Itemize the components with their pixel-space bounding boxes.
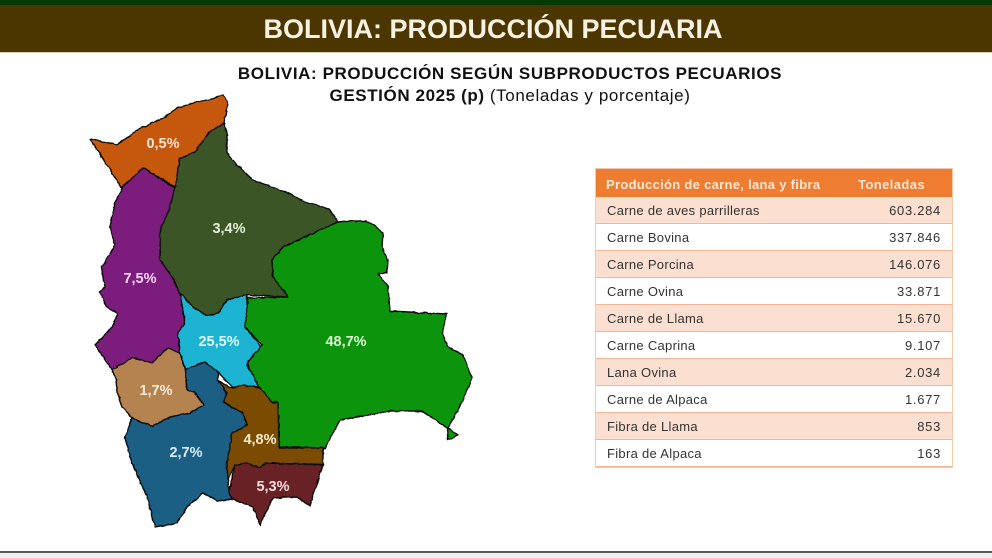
region: La Paz 7,5%: 7,5% — [123, 271, 157, 287]
top dark green strip — [0, 0, 992, 5]
row: Carne Ovina — [596, 278, 952, 305]
region: Oruro 1,7%: 1,7% — [139, 383, 173, 399]
row: Carne de Alpaca — [596, 386, 952, 413]
footer band — [0, 553, 992, 558]
row: Carne de Llama: 15.670 — [897, 311, 941, 326]
row: Carne Caprina — [596, 332, 952, 359]
region: Tarija 5,3%: 5,3% — [256, 479, 290, 495]
row: Carne Caprina: Carne Caprina — [607, 338, 695, 353]
title banner: BOLIVIA: PRODUCCIÓN PECUARIA — [263, 14, 722, 44]
region: Santa Cruz 48,7%: 48,7% — [325, 334, 367, 350]
row: Carne de Alpaca: 1.677 — [905, 392, 941, 407]
region: La Paz 7,5% — [95, 168, 185, 370]
region: Santa Cruz 48,7% — [245, 221, 472, 448]
row: Carne Porcina: Carne Porcina — [607, 257, 694, 272]
table header: Producción de carne, lana y fibra — [606, 177, 820, 192]
row: Fibra de Llama — [596, 413, 952, 440]
region: Pando 0,5% — [90, 95, 228, 188]
row: Carne Bovina: 337.846 — [889, 230, 941, 245]
row: Carne Porcina — [596, 251, 952, 278]
row: Carne Bovina: Carne Bovina — [607, 230, 689, 245]
row: Lana Ovina: Lana Ovina — [607, 365, 676, 380]
production table — [595, 168, 953, 468]
row: Fibra de Llama: Fibra de Llama — [607, 419, 698, 434]
title banner — [0, 5, 992, 53]
row: Carne de Llama — [596, 305, 952, 332]
row: Carne Caprina: 9.107 — [905, 338, 941, 353]
region: Pando 0,5%: 0,5% — [146, 136, 180, 152]
region: Beni 3,4%: 3,4% — [212, 221, 246, 237]
row: Lana Ovina — [596, 359, 952, 386]
region: Chuquisaca 4,8% — [218, 380, 323, 480]
row: Carne de aves parrilleras: Carne de aves parrilleras — [607, 203, 760, 218]
region: Cochabamba 25,5%: 25,5% — [198, 334, 240, 350]
row: Lana Ovina: 2.034 — [905, 365, 941, 380]
subtitle: BOLIVIA: PRODUCCIÓN SEGÚN SUBPRODUCTOS PECUARIOS — [238, 64, 782, 83]
table header — [596, 169, 952, 197]
region: Potosí 2,7% — [125, 362, 247, 527]
row: Carne de aves parrilleras: 603.284 — [889, 203, 941, 218]
row: Carne Bovina — [596, 224, 952, 251]
region: Oruro 1,7% — [112, 348, 204, 426]
row: Fibra de Llama: 853 — [917, 419, 941, 434]
table header: Toneladas — [858, 177, 925, 192]
subtitle — [238, 64, 782, 105]
region: Cochabamba 25,5% — [178, 293, 261, 388]
row: Carne Porcina: 146.076 — [889, 257, 941, 272]
row: Fibra de Alpaca: 163 — [917, 446, 941, 461]
subtitle: GESTIÓN 2025 (p) (Toneladas y porcentaje) — [330, 86, 690, 105]
region: Chuquisaca 4,8%: 4,8% — [243, 432, 277, 448]
row: Fibra de Alpaca — [596, 440, 952, 467]
region: Tarija 5,3% — [229, 463, 323, 525]
footer rule — [0, 551, 992, 553]
row: Carne Ovina: Carne Ovina — [607, 284, 683, 299]
row: Carne de Llama: Carne de Llama — [607, 311, 704, 326]
row: Carne de aves parrilleras — [596, 197, 952, 224]
region: Beni 3,4% — [160, 123, 338, 316]
row: Carne de Alpaca: Carne de Alpaca — [607, 392, 708, 407]
region: Potosí 2,7%: 2,7% — [169, 445, 203, 461]
row: Carne Ovina: 33.871 — [897, 284, 941, 299]
row: Fibra de Alpaca: Fibra de Alpaca — [607, 446, 702, 461]
